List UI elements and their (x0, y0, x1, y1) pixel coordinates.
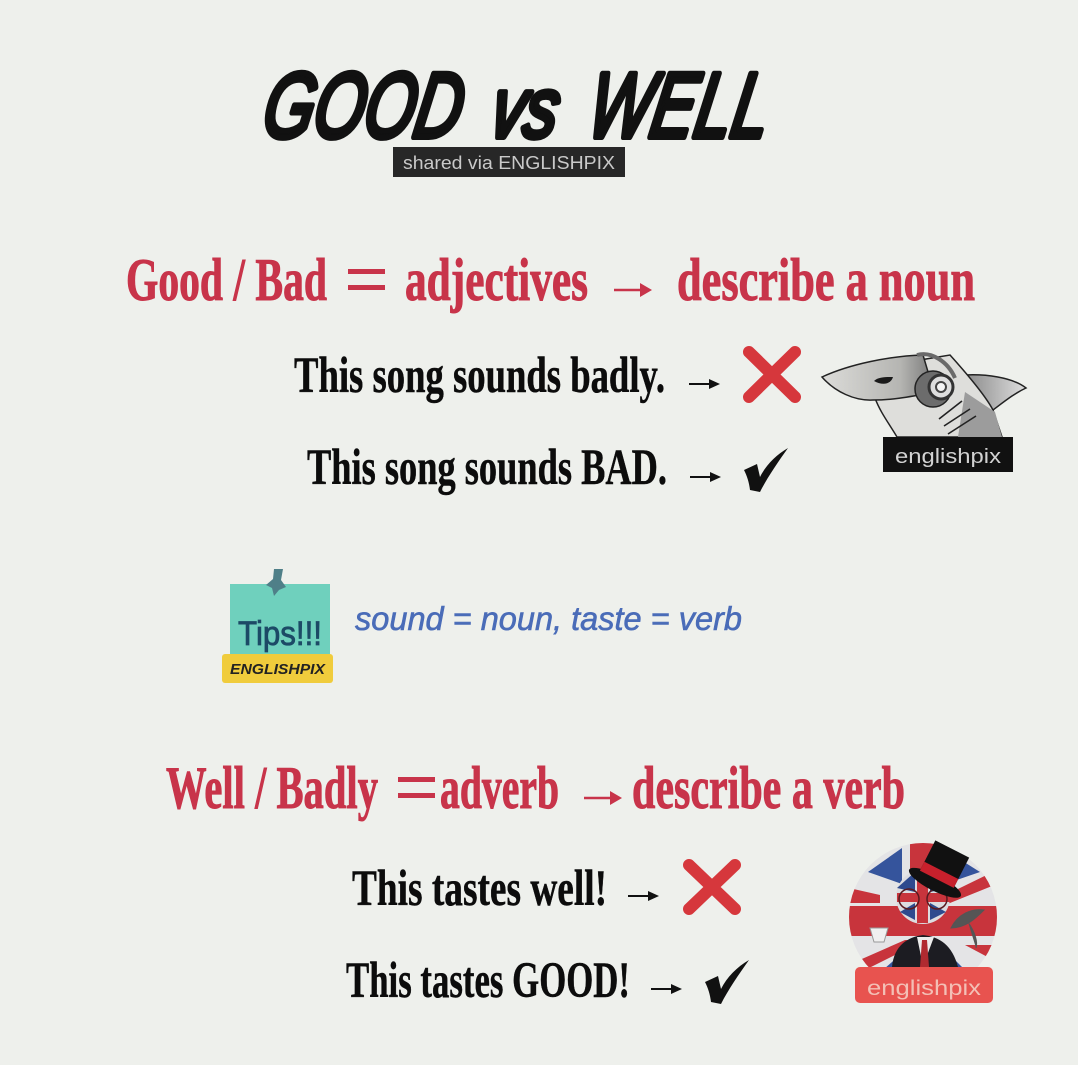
heading: good and bad are adjectives: adjectives (405, 247, 588, 313)
heading: well and badly are adverbs (166, 755, 905, 821)
icon: british character with flag (849, 836, 997, 1003)
icon: red cross (749, 352, 795, 397)
icon: check mark (705, 960, 749, 1004)
title: GOOD (257, 54, 473, 157)
example: correct bad sentence: This song sounds BAD. (307, 440, 667, 496)
subtitle badge: shared via ENGLISHPIX (403, 153, 615, 173)
label: englishpix (883, 437, 1013, 472)
title: vs (485, 61, 567, 156)
subtitle badge (393, 147, 625, 177)
example: incorrect well sentence: This tastes well! (352, 861, 607, 917)
heading: well and badly are adverbs: describe a verb (632, 755, 905, 821)
title (257, 54, 780, 157)
heading: good and bad are adjectives (126, 247, 975, 313)
heading: well and badly are adverbs: adverb (440, 755, 559, 821)
icon: shark with headphones (822, 354, 1026, 472)
heading: good and bad are adjectives: Good / Bad (126, 247, 327, 313)
label: englishpix: englishpix (895, 446, 1001, 468)
icon: tips sticky note (222, 569, 333, 683)
teacup (870, 928, 888, 942)
example: correct good sentence: This tastes GOOD! (346, 953, 630, 1009)
character suit (892, 935, 958, 967)
label: englishpix red (855, 967, 993, 1003)
tip text: sound = noun, taste = verb (355, 600, 742, 637)
title: WELL (582, 54, 780, 157)
umbrella (951, 910, 984, 948)
icon: tips sticky note: Tips!!! (238, 615, 322, 653)
top hat (906, 836, 978, 903)
heading: well and badly are adverbs: Well / Badly (166, 755, 378, 821)
character head (896, 870, 950, 924)
example: incorrect bad sentence: This song sounds badly. (294, 348, 665, 404)
heading: good and bad are adjectives: describe a noun (677, 247, 975, 313)
label: englishpix red: englishpix (867, 977, 982, 1000)
label: englishpix yellow: ENGLISHPIX (230, 661, 326, 678)
icon: check mark (744, 448, 788, 492)
icon: red cross (689, 865, 735, 909)
